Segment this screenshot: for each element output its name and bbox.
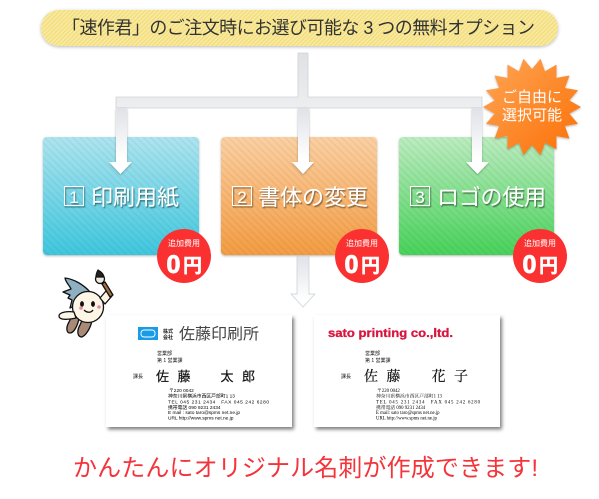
business card: Sato Hanako: 〒220 0042 [377,388,400,394]
badge: free 1: 0 [167,251,180,279]
panel: logo [399,137,554,255]
business card: Sato Hanako: E mail: sato taro@spms net.ne.jp [376,411,440,416]
panel: logo: ロゴの使用 [437,185,546,210]
badge: free 3: 円 [539,256,558,277]
business card: Sato Hanako: 課長 [341,373,351,380]
business card: Sato Hanako [314,315,500,427]
arrow: down to cards [291,256,315,307]
badge: free 2: 0 [345,251,358,279]
badge: free 2: 円 [361,256,380,277]
closing message: かんたんにオリジナル名刺が作成できます! [73,455,538,482]
business card: Sato Taro: 神奈川県横浜市西区戸部町1 13 [168,392,235,400]
badge: free 2 [335,229,389,283]
badge: free 3: 0 [523,251,536,279]
badge: free 1: 円 [183,256,202,277]
business card: Sato Hanako: 神奈川県横浜市西区戸部町1 13 [376,392,443,400]
icon: mascot with brush [59,270,113,337]
business card: Sato Taro: URL http://www.spms net.ne.jp [168,416,234,422]
starburst: free choice [483,59,581,155]
business card: Sato Taro: 課長 [133,373,143,380]
business card: Sato Taro: 佐藤印刷所 [179,325,259,343]
badge: free 1: 追加費用 [168,238,200,248]
panel: typeface: 書体の変更 [258,185,368,210]
business card: Sato Taro: 第 1 営業課 [157,357,183,364]
icon: company logo [138,327,158,340]
badge: free 3: 追加費用 [524,238,556,248]
business card: Sato Taro: 株式 [163,328,173,335]
arrows: branching connector [109,53,489,174]
business card: Sato Taro: 営業部 [157,350,172,357]
business card: Sato Taro: 携帯電話 090 9231 2434 [168,404,221,411]
business card: Sato Taro: TEL 045 231 2434 FAX 045 242 6280 [168,400,269,406]
title banner: 「速作君」のご注文時にお選び可能な 3 つの無料オプション [62,18,535,38]
business card: Sato Taro: 〒220 0042 [169,388,194,394]
starburst: free choice: 選択可能 [502,107,562,124]
panel: typeface: 2 [237,188,247,207]
business card: Sato Taro: E mail : sato taro@spms net.ne.jp [168,410,240,416]
panel: logo: 3 [415,188,425,207]
panel: typeface [221,137,377,255]
business card: Sato Hanako: 佐藤 花子 [364,368,468,385]
business card: Sato Hanako: 第 1 営業課 [365,357,391,364]
business card: Sato Hanako: URL http://www.spms net.ne.jp [376,416,438,422]
title banner [41,10,558,46]
business card: Sato Hanako: 営業部 [365,350,380,357]
business card: Sato Hanako: 携帯電話 090 9231 2434 [376,404,426,411]
badge: free 2: 追加費用 [346,238,378,248]
panel: paper: 印刷用紙 [91,185,179,210]
panel: paper [43,137,199,255]
business card: Sato Taro [106,315,292,427]
panel: paper: 1 [69,188,79,207]
company logotype: sato printing co.,ltd. [328,326,453,340]
starburst: free choice: ご自由に [502,89,562,106]
business card: Sato Taro: 佐藤 太郎 [156,369,255,384]
business card: Sato Hanako: TEL 045 231 2434 FAX 045 242 6280 [376,400,481,406]
business card: Sato Taro: 会社 [163,334,173,341]
badge: free 3 [513,229,567,283]
badge: free 1 [157,229,211,283]
